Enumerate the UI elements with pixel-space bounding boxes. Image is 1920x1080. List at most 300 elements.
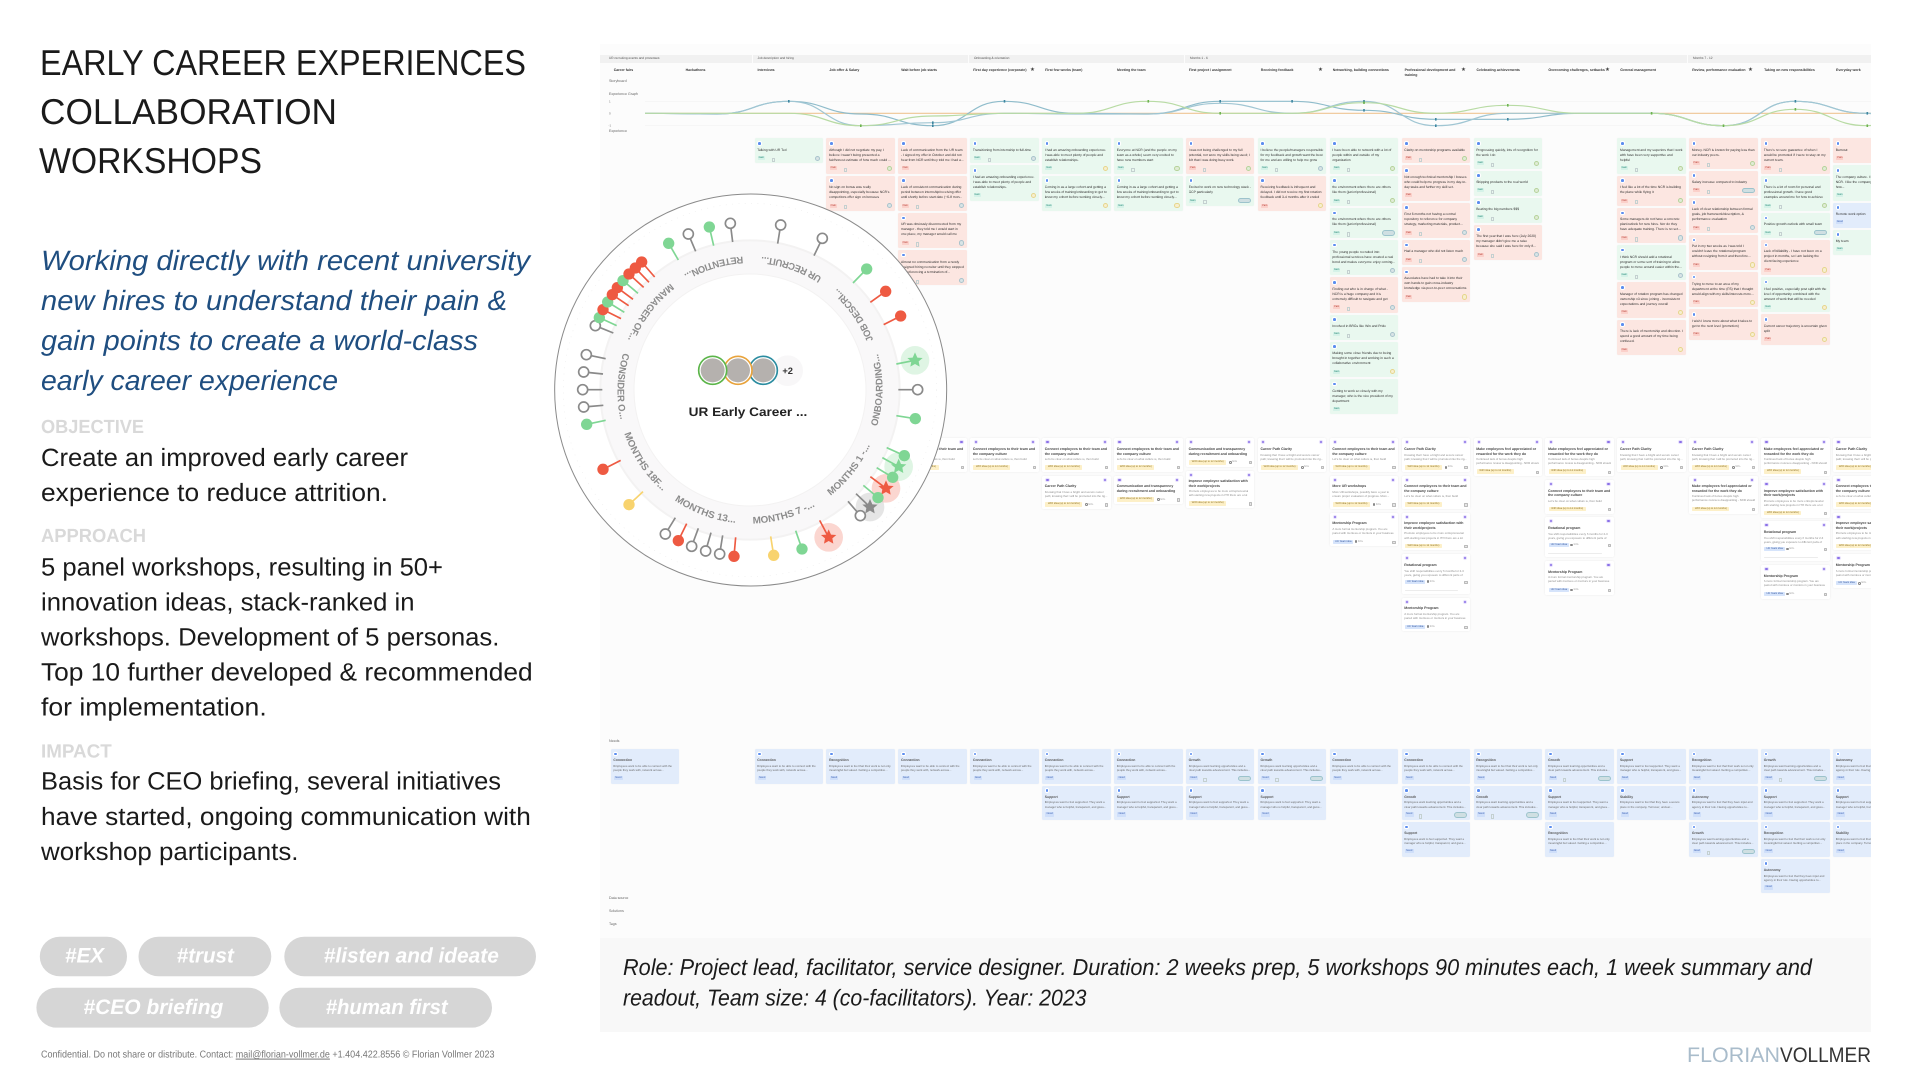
- need column 13: Need: [1694, 812, 1700, 815]
- experience column: taking on new responsibilities: There's no sure guarantee of when I would be promoted if I were to stay on my current team.: [1764, 148, 1826, 162]
- need column 12: [1617, 749, 1686, 820]
- idea column 11: UR Team idea: [1551, 543, 1567, 546]
- pins: job description: [853, 263, 906, 325]
- experience column: meeting the team: Everyone at NCR (and the people on my team as a whole) seem very excited to have new members start: [1117, 148, 1177, 162]
- experience column: networking: Gain: [1334, 332, 1339, 335]
- idea column 9: WIO idea (up to 12 months): [1407, 544, 1439, 547]
- need column 1: [826, 749, 895, 784]
- need column 10: [1474, 749, 1542, 820]
- column headers: Career fairs: [614, 68, 633, 72]
- subtitle: gain points to create a world-class: [41, 325, 478, 356]
- experience column: job offer and salary: Pain: [831, 166, 836, 169]
- column headers: Everyday work: [1836, 68, 1861, 72]
- ring stage labels: MONTHS 18F...: [624, 432, 663, 490]
- experience column: general management: Pain: [1622, 310, 1627, 313]
- idea column 9: 50%: [1448, 465, 1453, 468]
- experience column: celebrating achievements: Gain: [1478, 161, 1483, 164]
- idea column 14: Make employees feel appreciated or rewarded for the work they do: [1764, 447, 1824, 456]
- idea column 4: Connect employees to their team and the company culture: [1045, 447, 1107, 456]
- idea column 7: [1260, 440, 1324, 470]
- ring stage labels: CONSIDER O...: [618, 354, 629, 419]
- need column 11: Need: [1550, 776, 1556, 779]
- idea column 4: Let's be clear on what culture is, then build: [1045, 457, 1098, 461]
- experience column: taking on new responsibilities: Current career trajectory is uncertain given split: [1764, 324, 1827, 333]
- idea column 10: Make employees feel appreciated or rewarded for the work they do: [1476, 447, 1536, 456]
- column headers: Review, performance evaluation: [1692, 68, 1746, 72]
- need column 11: Support: [1548, 795, 1561, 799]
- experience column: celebrating achievements: Shipping products to the real world: [1476, 180, 1528, 184]
- experience column: general management: Some managers do not have a concrete plan/outlook for new hires. Nor do they have adequate training. There is no set...: [1620, 217, 1681, 231]
- idea column 5: Connect employees to their team and the company culture: [1117, 447, 1179, 456]
- experience column: networking: Involved in BRGs like Win and Pride: [1332, 324, 1386, 328]
- need column 9: Growth: [1404, 795, 1416, 799]
- experience column: professional development: First 6 months not having a central repository to reference for company strategy, marketing materials, product...: [1404, 212, 1463, 226]
- idea column 7: 50%: [1304, 465, 1309, 468]
- need column 7: Growth: [1260, 758, 1272, 762]
- phase band: UR recruiting: [600, 55, 752, 63]
- ring stage labels: UR RECRUIT...: [762, 257, 820, 283]
- need column 4: Employees want to feel supported. They want a manager who is helpful, transparent, and gives...: [1045, 800, 1106, 809]
- experience column: wait before job starts: Pain: [903, 241, 908, 244]
- need column 13: Need: [1694, 776, 1700, 779]
- experience column: everyday work: Pain: [1837, 156, 1842, 159]
- experience column: taking on new responsibilities: [1761, 138, 1830, 345]
- idea column 6: 50%: [1232, 460, 1237, 463]
- need column 0: Employees want to be able to connect with the people they work with, network across...: [757, 764, 816, 772]
- need column 2: Need: [903, 776, 909, 779]
- experience column: first few weeks: I had an amazing onboarding experience. I was able to meet plenty of people and establish relationships.: [1045, 148, 1106, 162]
- experience column: review and performance evaluation: Trying to move to an area of my department at the time (FS) that I thought would align with my skills/interests more...: [1692, 282, 1754, 296]
- chart: circular journey wheel: [550, 180, 970, 600]
- experience column: networking: the environment where there are others like them (junior/professional): [1332, 185, 1391, 194]
- idea column 11: Mentorship Program: [1548, 570, 1582, 574]
- experience column: general management: Gain: [1621, 166, 1627, 169]
- experience column: networking: Gain: [1334, 370, 1339, 373]
- need column 13: Growth: [1692, 831, 1704, 835]
- pins: manager of: [590, 256, 655, 333]
- column headers: First day experience (corporate): [973, 68, 1026, 72]
- experience column: first day experience: Transitioning from internship to full-time: [973, 148, 1031, 152]
- need column 9: Employees want learning opportunities and a clear path towards advancement. This includes...: [1404, 800, 1466, 809]
- idea column 13: WIO idea (up to 12 months): [1695, 465, 1727, 468]
- need column 15: Support: [1836, 795, 1849, 799]
- experience column: networking: Gain: [1334, 198, 1339, 202]
- need column 3: Need: [975, 776, 981, 779]
- tag: human first: #human first: [326, 996, 449, 1019]
- need column 2: Employees want to be able to connect with the people they work with, network across...: [901, 764, 960, 772]
- experience column: review and performance evaluation: Put in my two weeks as I was told I couldn't leave the rotational program without resigning from it and therefore...: [1692, 244, 1751, 258]
- idea column 11: [1548, 440, 1611, 592]
- subtitle: early career experience: [41, 365, 338, 396]
- need column 12: Need: [1622, 812, 1628, 815]
- callout: role and duration: [600, 938, 1871, 1032]
- idea column 8: WIO idea (up to 12 months): [1336, 465, 1367, 468]
- column headers: Interviews: [758, 68, 775, 72]
- text block: objective: [41, 444, 408, 507]
- idea column 2: [901, 440, 964, 470]
- column headers: ★: [1605, 66, 1610, 72]
- need column 14: Support: [1764, 795, 1777, 799]
- idea column 4: WIO idea (up to 12 months): [1048, 502, 1080, 505]
- subtitle: [41, 245, 532, 396]
- need column 14: Employees want to feel that they have input and agency in their role. Having opportunities to...: [1764, 874, 1824, 882]
- text block: approach: innovation ideas, stack-ranked in: [41, 589, 414, 617]
- experience column: professional development: Pain: [1406, 295, 1411, 298]
- row label: needs: Needs: [609, 738, 619, 742]
- need column 4: [1042, 749, 1111, 820]
- experience column: professional development: [1402, 138, 1470, 302]
- idea column 15: Career Path Clarity: [1836, 447, 1867, 451]
- need column 5: Employees want to be able to connect with the people they work with, network across...: [1117, 764, 1175, 772]
- subtitle: Working directly with recent university: [41, 245, 532, 276]
- experience column: first day experience: Gain: [974, 156, 980, 159]
- idea column 14: UR Team idea: [1766, 592, 1783, 595]
- idea column 6: Communication and transparency during recruitment and onboarding: [1189, 447, 1247, 456]
- need column 11: [1545, 749, 1614, 857]
- experience column: interviews: [755, 138, 823, 163]
- need column 11: Need: [1550, 849, 1556, 852]
- idea column 11: Make employees feel appreciated or rewarded for the work they do: [1548, 447, 1608, 456]
- idea column 5: Let's be clear on what culture is, then build: [1117, 457, 1170, 461]
- idea column 4: [1044, 440, 1108, 507]
- idea column 15: WIO idea (up to 12 months): [1839, 544, 1871, 547]
- experience column: celebrating achievements: Beating the big numbers $$$: [1476, 207, 1519, 211]
- experience column: professional development: Had a manager who did not listen much: [1404, 249, 1463, 253]
- experience column: professional development: Clarity on mentorship programs available: [1404, 148, 1465, 152]
- experience column: review and performance evaluation: Pain: [1693, 226, 1699, 228]
- experience column: first few weeks: Gain: [1046, 166, 1052, 169]
- need column 7: Need: [1262, 776, 1269, 779]
- idea column 9: [1404, 440, 1468, 629]
- idea column 9: Connect employees to their team and the company culture: [1404, 484, 1467, 493]
- pins: months 18: [597, 460, 643, 510]
- experience column: everyday work: Burnout: [1836, 148, 1847, 152]
- need column 4: Connection: [1045, 758, 1063, 762]
- idea column 11: Let's be clear on what culture is, then build: [1548, 499, 1602, 503]
- experience column: taking on new responsibilities: I feel positive, especially post split with the level of opportunity combined with the amount of work that will be needed: [1764, 287, 1826, 301]
- text block: approach: for implementation.: [41, 694, 267, 722]
- idea column 5: WIO idea (up to 12 months): [1120, 497, 1152, 500]
- idea column 11: WIO idea (up to 12 months): [1551, 469, 1583, 472]
- need column 14: Recognition: [1764, 831, 1783, 835]
- need column 12: Support: [1620, 758, 1633, 762]
- need column 15: Autonomy: [1836, 758, 1852, 762]
- experience column: celebrating achievements: Gain: [1478, 188, 1483, 191]
- pins: retention: [663, 218, 735, 260]
- ring stage labels: RETENTION...: [684, 256, 743, 276]
- tag: CEO briefing: #CEO briefing: [83, 996, 224, 1019]
- idea column 12: Career Path Clarity: [1620, 447, 1652, 451]
- experience column: taking on new responsibilities: Gain: [1765, 230, 1771, 234]
- experience column: professional development: Not enough technical mentorship / bosses who could help me progress in my day-to-day tasks and further my skill set.: [1404, 175, 1467, 189]
- experience column: taking on new responsibilities: Positive growth outlook with small team: [1764, 222, 1822, 226]
- chart: experience graph lines: [608, 99, 1871, 128]
- experience column: wait before job starts: Lack of consistent communication during period between internship/receiving offer until shortly before start date (~6-8 mon...: [901, 185, 962, 199]
- need column 15: [1833, 749, 1902, 857]
- experience column: first project: Excited to work on new technology stack - GCP particularly: [1189, 185, 1251, 194]
- ring stage labels: ONBOARDING...: [871, 354, 883, 426]
- need column 4: Need: [1047, 812, 1053, 815]
- phase band: months 1-6: [1185, 55, 1687, 63]
- need column 13: [1689, 749, 1758, 857]
- idea column 14: WIO idea (up to 12 months): [1767, 511, 1799, 514]
- experience column: taking on new responsibilities: Gain: [1765, 305, 1771, 308]
- row label: experience: Experience: [609, 128, 627, 132]
- idea column 3: Connect employees to their team and the company culture: [973, 447, 1035, 456]
- need column -2: Need: [615, 776, 621, 779]
- need column 13: Employees want to feel that they have input and agency in their role. Having opportunities to...: [1692, 800, 1752, 809]
- experience column: celebrating achievements: Pain: [1478, 252, 1483, 256]
- need column 13: Employees want to feel that their work is not only meaningful but valued. Getting a competitive...: [1692, 764, 1754, 772]
- experience column: review and performance evaluation: Pain: [1693, 332, 1699, 335]
- pins: months 1: [848, 448, 913, 521]
- experience column: general management: Pain: [1622, 348, 1627, 351]
- title: WORKSHOPS: [39, 140, 262, 181]
- wheel title: UR Early Career ...: [689, 405, 807, 419]
- idea column 4: Career Path Clarity: [1045, 484, 1076, 488]
- need column 14: Employees want learning opportunities and a clear path towards advancement. This includes...: [1764, 764, 1825, 772]
- experience column: interviews: Talking with UR Ted: [757, 148, 786, 152]
- row label: data source: Data source: [609, 896, 628, 900]
- idea column 9: Rotational program: [1404, 563, 1437, 567]
- idea column 15: 50%: [1861, 581, 1866, 584]
- experience column: review and performance evaluation: Pain: [1693, 263, 1699, 266]
- experience column: general management: Gain: [1621, 273, 1627, 276]
- need column 14: Need: [1766, 812, 1772, 815]
- ring stage labels: [615, 254, 885, 526]
- experience column: job offer and salary: Pain: [831, 204, 836, 206]
- heading: impact: IMPACT: [41, 742, 112, 763]
- need column 13: Recognition: [1692, 758, 1711, 762]
- idea column 8: [1332, 440, 1396, 544]
- idea column 4: 50%: [1088, 503, 1093, 506]
- idea column 6: WIO idea (up to 12 months): [1192, 460, 1224, 463]
- idea column 9: WIO idea (up to 12 months): [1407, 465, 1439, 468]
- ring stage labels: MONTHS 7 -...: [753, 505, 814, 524]
- avatars: [699, 355, 803, 386]
- tag: listen and ideate: #listen and ideate: [324, 944, 499, 968]
- need column 6: Employees want learning opportunities and a clear path towards advancement. This includes...: [1189, 764, 1250, 772]
- idea column 12: WIO idea (up to 12 months): [1623, 465, 1655, 468]
- idea column 11: WIO idea (up to 12 months): [1551, 507, 1583, 510]
- idea column 9: WIO idea (up to 12 months): [1407, 502, 1439, 505]
- need column 4: Need: [1047, 776, 1053, 779]
- idea column 7: WIO idea (up to 12 months): [1264, 465, 1296, 468]
- column headers: First project / assignment: [1189, 68, 1231, 72]
- idea column 9: Mentorship Program: [1404, 606, 1439, 610]
- idea column 15: [1836, 440, 1871, 585]
- experience column: review and performance evaluation: Pain: [1693, 188, 1699, 191]
- experience column: first day experience: [970, 138, 1039, 201]
- need column 10: Employees want to feel that their work is not only meaningful but valued. Getting a competitive...: [1476, 764, 1538, 772]
- experience column: interviews: Gain: [759, 156, 764, 159]
- experience column: celebrating achievements: Gain: [1478, 215, 1483, 218]
- callout: role and duration: Role: Project lead, facilitator, service designer. Duration: 2 weeks prep, 5 workshops 90 minutes each, 1 week summary and: [623, 954, 1813, 980]
- idea column 9: 50%: [1430, 625, 1435, 628]
- footer: confidentiality and contact: Confidential. Do not share or distribute. Contact: mail@florian-vollmer.de +1.404.422.8556 © Florian Vollmer 2023: [41, 1050, 495, 1061]
- column headers: Celebrating achievements: [1476, 68, 1520, 72]
- idea column 11: 50%: [1574, 543, 1579, 546]
- phase band: months 7-12: Months 7 - 12: [1693, 56, 1712, 60]
- idea column 7: Knowing that I have a bright and secure career path; knowing that I will be promoted into the rig...: [1260, 453, 1323, 461]
- need column 13: Need: [1694, 849, 1700, 852]
- tag: EX: #EX: [65, 944, 106, 968]
- idea column 5: 50%: [1160, 498, 1165, 501]
- idea column 10: WIO idea (up to 12 months): [1479, 469, 1511, 472]
- text block: approach: Top 10 further developed & recommended: [41, 658, 533, 686]
- need column -2: Employees want to be able to connect with the people they work with, network across...: [613, 764, 672, 772]
- need column 10: Need: [1478, 776, 1484, 779]
- chart: experience graph lines: 0: [609, 111, 611, 115]
- ring stage labels: MONTHS 1 -...: [827, 446, 870, 496]
- need column 8: [1330, 749, 1398, 784]
- experience column: receiving feedback: I believe the people/managers responsible for my feedback and growth want the best for me and are willing to help me grow: [1260, 148, 1323, 162]
- experience column: general management: I feel like a lot of the time NCR is building the plane while flying it: [1620, 185, 1681, 194]
- need column 6: Need: [1190, 776, 1197, 779]
- need column 14: Need: [1766, 776, 1772, 779]
- need column 9: Support: [1404, 831, 1417, 835]
- idea column 12: [1620, 440, 1683, 470]
- need column 15: Stability: [1836, 831, 1849, 835]
- need column 14: Growth: [1764, 758, 1776, 762]
- experience column: review and performance evaluation: Pain: [1693, 161, 1699, 164]
- experience column: review and performance evaluation: Salary increase compared to industry: [1692, 180, 1747, 184]
- pins: months 7: [768, 520, 843, 561]
- idea column 6: [1188, 440, 1252, 506]
- need column 15: Need: [1838, 849, 1844, 852]
- need column 7: Employees want learning opportunities and a clear path towards advancement. This includes...: [1260, 764, 1322, 772]
- need column 13: Employees want learning opportunities and a clear path towards advancement. This includes...: [1692, 837, 1753, 845]
- column headers: Taking on new responsibilities: [1764, 68, 1815, 72]
- idea column 8: More UR workshops: [1332, 484, 1366, 488]
- panel: journey map board: [600, 44, 1871, 938]
- phase band: months 1-6: Months 1 - 6: [1190, 56, 1208, 60]
- idea column 11: Rotational program: [1548, 526, 1580, 530]
- idea column 13: [1692, 440, 1755, 511]
- avatars: +2: [782, 366, 793, 376]
- need column 11: Employees want learning opportunities and a clear path towards advancement. This includes...: [1548, 764, 1610, 772]
- text block: impact: [40, 768, 531, 866]
- need column 14: Autonomy: [1764, 868, 1781, 872]
- column headers: ★: [1748, 66, 1753, 72]
- phase band: job description and hiring: [752, 55, 968, 63]
- tag: trust: [138, 937, 271, 976]
- experience column: wait before job starts: Pain: [903, 278, 908, 281]
- column headers: ★: [1318, 66, 1323, 72]
- chart: experience graph lines: 1: [609, 99, 611, 103]
- panel: project summary text column: [36, 42, 536, 1061]
- row label: storyboard: Storyboard: [609, 79, 627, 83]
- experience column: meeting the team: [1114, 138, 1183, 211]
- experience column: networking: I have been able to network with a lot of people within and outside of my organization: [1332, 148, 1391, 162]
- column headers: Networking, building connections: [1333, 68, 1389, 72]
- need column 14: Employees want to feel supported. They want a manager who is helpful, transparent, and gives...: [1764, 800, 1825, 809]
- idea column 3: Let's be clear on what culture is, then build: [973, 457, 1027, 461]
- experience column: professional development: Pain: [1406, 258, 1411, 260]
- need column 6: Employees want to feel supported. They want a manager who is helpful, transparent, and gives...: [1189, 800, 1250, 809]
- experience column: first day experience: Gain: [974, 193, 980, 196]
- need column -2: Connection: [613, 758, 632, 762]
- phase band: months 7-12: [1688, 55, 1871, 63]
- tag: EX: [40, 937, 127, 976]
- idea column 8: 50%: [1376, 503, 1381, 506]
- need column 15: Need: [1838, 776, 1844, 779]
- need column 12: Stability: [1620, 795, 1633, 799]
- logo: Florian Vollmer: FLORIAN: [1687, 1044, 1780, 1067]
- tag: human first: [279, 988, 492, 1028]
- title: EARLY CAREER EXPERIENCES: [40, 42, 526, 83]
- idea column 15: Mentorship Program: [1836, 563, 1870, 567]
- column headers: Job offer & Salary: [829, 68, 859, 72]
- need column 6: Need: [1190, 812, 1197, 815]
- experience column: first few weeks: [1042, 138, 1111, 211]
- experience column: celebrating achievements: [1474, 138, 1542, 260]
- need column 3: [970, 749, 1039, 784]
- need column 7: Support: [1260, 795, 1273, 799]
- need column 9: Employees want to feel supported. They want a manager who is helpful, transparent, and gives...: [1404, 837, 1466, 845]
- idea column 11: 50%: [1574, 588, 1579, 591]
- experience column: review and performance evaluation: I wish I knew more about what it takes to get to the next level (promotion): [1692, 319, 1752, 328]
- idea column 9: 50%: [1430, 580, 1435, 583]
- column headers: [614, 66, 1861, 77]
- idea column 13: Make employees feel appreciated or rewarded for the work they do: [1692, 484, 1752, 493]
- need column 5: Need: [1119, 812, 1125, 815]
- experience column: receiving feedback: Receiving feedback is infrequent and delayed. I did not receive my first rotation feedback until 3-4 months after it ended: [1260, 185, 1321, 199]
- idea column 9: UR Team idea: [1407, 625, 1423, 628]
- idea column 11: Connect employees to their team and the company culture: [1548, 489, 1610, 497]
- experience column: everyday work: Remote work option: [1836, 212, 1865, 216]
- idea column 13: Knowing that I have a bright and secure career path; knowing that I will be promoted into the rig...: [1692, 453, 1754, 461]
- phase band: job description and hiring: Job description and hiring: [758, 56, 794, 60]
- need column 10: Need: [1478, 812, 1484, 815]
- phase band: onboarding and orientation: Onboarding & orientation: [974, 56, 1009, 60]
- need column 8: Need: [1334, 776, 1340, 779]
- idea column 8: More UR workshops, possibly twice a year to ensure proper evaluation of progress. More...: [1332, 490, 1389, 498]
- need column 12: Employees want to feel that they have a secure place in the company. Turnover, unclear...: [1620, 800, 1680, 809]
- idea column 12: Knowing that I have a bright and secure career path; knowing that I will be promoted into the rig...: [1620, 453, 1683, 461]
- tag: listen and ideate: [284, 937, 536, 976]
- experience column: taking on new responsibilities: Lack of billability - I have not been on a project in months, so I am lacking the client facing experience: [1764, 249, 1822, 263]
- row label: experience graph: Experience Graph: [609, 92, 638, 96]
- need column 3: Connection: [973, 758, 992, 762]
- experience column: review and performance evaluation: [1689, 138, 1758, 340]
- experience column: everyday work: Gain: [1837, 247, 1843, 250]
- need column 1: Recognition: [829, 758, 849, 762]
- need column 5: [1114, 749, 1183, 820]
- experience column: networking: Gain: [1334, 231, 1339, 234]
- need column 10: Growth: [1476, 795, 1488, 799]
- column headers: Receiving feedback: [1261, 68, 1293, 72]
- need column 11: Employees want to feel that their work is not only meaningful but valued. Getting a competitive...: [1548, 837, 1610, 845]
- need column 14: Employees want to feel that their work is not only meaningful but valued. Getting a competitive...: [1764, 837, 1825, 845]
- need column 2: Connection: [901, 758, 920, 762]
- need column 6: [1186, 749, 1254, 820]
- subtitle: new hires to understand their pain &: [41, 285, 507, 316]
- column headers: Professional development and training: [1405, 68, 1455, 76]
- logo: Florian Vollmer: [1680, 1040, 1875, 1070]
- experience column: first project: Gain: [1190, 198, 1196, 202]
- need column 0: [755, 749, 823, 784]
- need column 12: Need: [1622, 776, 1628, 779]
- experience column: general management: Pain: [1622, 236, 1627, 239]
- need column 6: Support: [1189, 795, 1202, 799]
- column headers: First few weeks (team): [1045, 68, 1082, 72]
- experience column: first project: [1186, 138, 1254, 206]
- need column 9: Need: [1406, 849, 1412, 852]
- idea column 5: WIO idea (up to 12 months): [1120, 465, 1152, 468]
- experience column: professional development: Associates have had to take it into their own hands to gain cross-industry knowledge via peer-to-peer conversations: [1404, 276, 1466, 290]
- need column 9: Need: [1406, 776, 1412, 779]
